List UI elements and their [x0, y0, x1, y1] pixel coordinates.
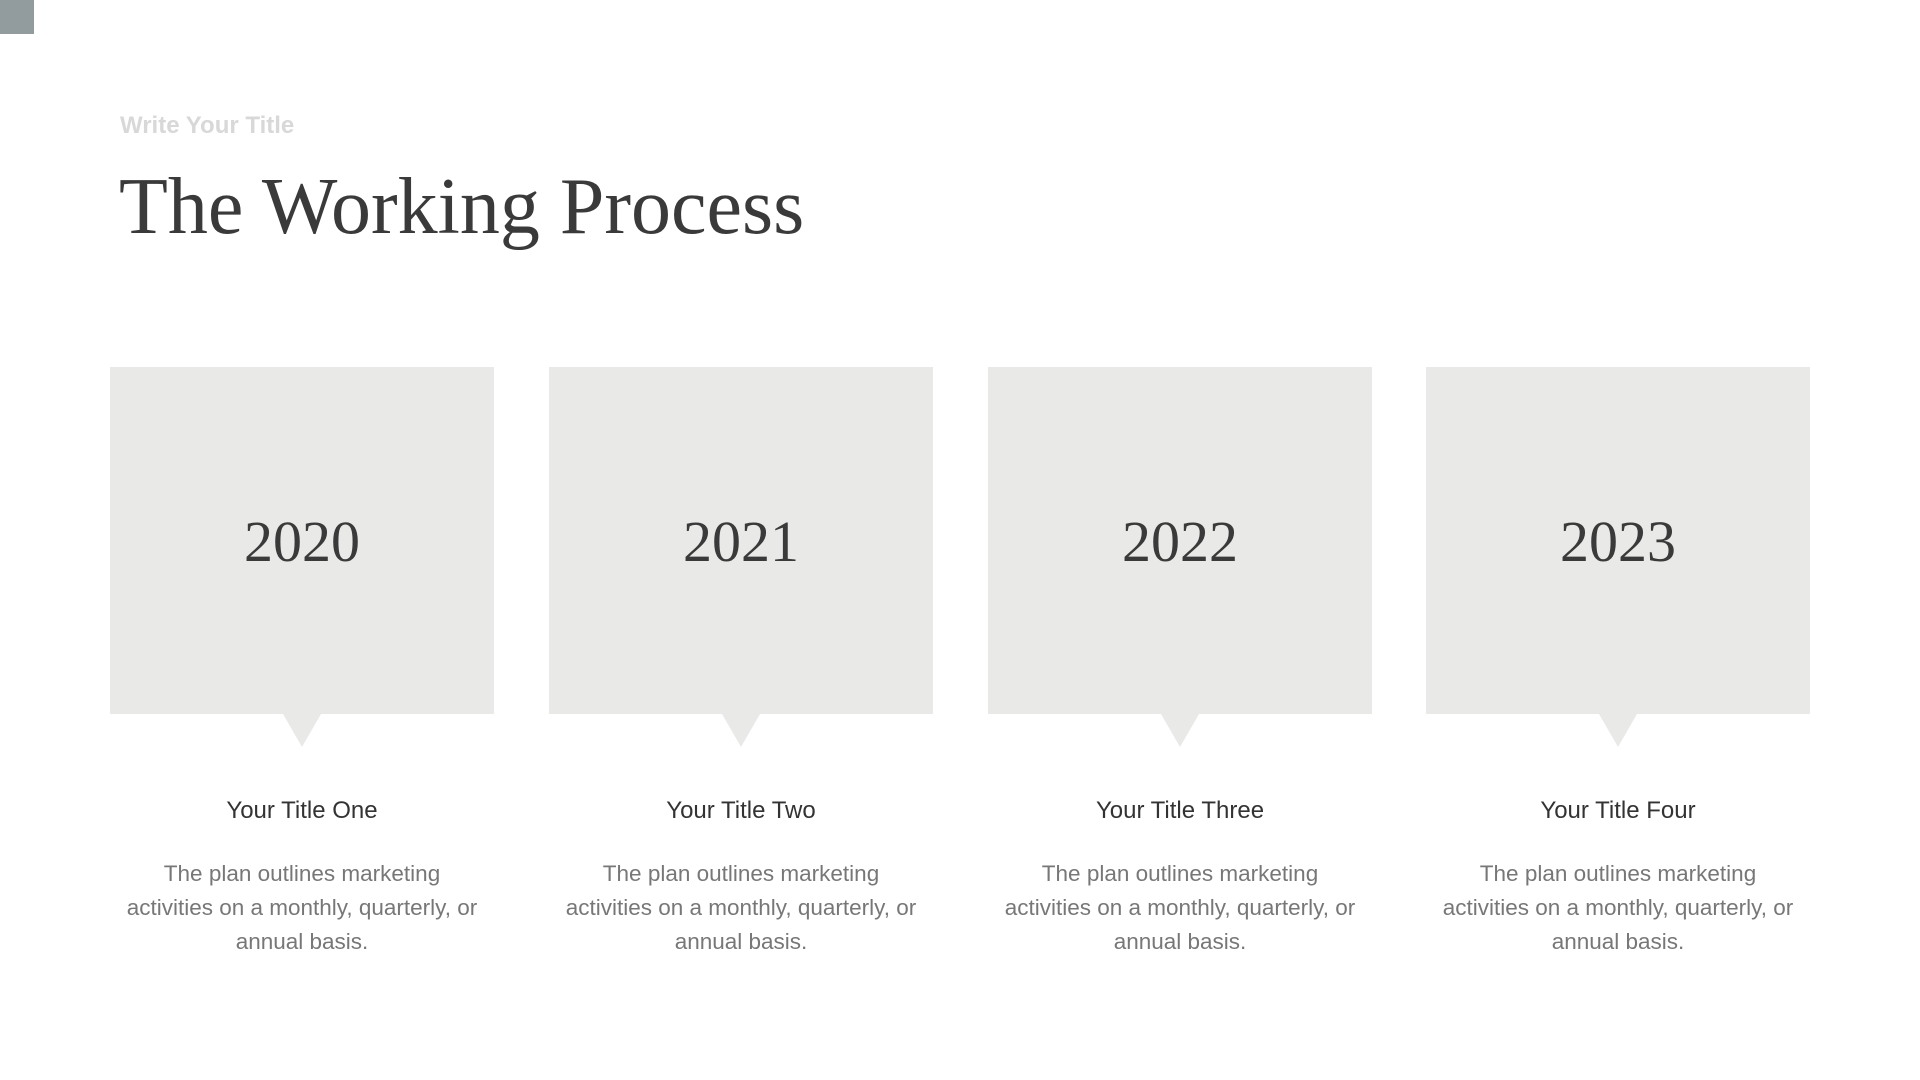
- text: three: The plan outlines marketing: [1042, 861, 1318, 886]
- text: two: [566, 797, 916, 954]
- panel: 2021: [549, 367, 933, 714]
- text: four: The plan outlines marketing: [1480, 861, 1756, 886]
- text: four: Your Title Four: [1540, 797, 1696, 824]
- text: four: [1443, 797, 1793, 954]
- title: The Working Process: [119, 163, 804, 251]
- panel: 2020: [110, 367, 494, 714]
- panel: 2022: 2022: [1122, 509, 1238, 574]
- text: four: annual basis.: [1552, 929, 1684, 954]
- panel: 2023: [1426, 367, 1810, 714]
- text: four: activities on a monthly, quarterly, or: [1443, 895, 1793, 920]
- text: one: The plan outlines marketing: [164, 861, 440, 886]
- panel: 2023: 2023: [1560, 509, 1676, 574]
- panel: 2020: 2020: [244, 509, 360, 574]
- text: two: annual basis.: [675, 929, 807, 954]
- text: two: Your Title Two: [666, 797, 816, 824]
- text: two: activities on a monthly, quarterly, or: [566, 895, 916, 920]
- text: three: Your Title Three: [1096, 797, 1264, 824]
- text: one: activities on a monthly, quarterly, or: [127, 895, 477, 920]
- text: two: The plan outlines marketing: [603, 861, 879, 886]
- text: one: Your Title One: [226, 797, 378, 824]
- text: three: activities on a monthly, quarterly, or: [1005, 895, 1355, 920]
- panel: 2021: 2021: [683, 509, 799, 574]
- text: three: [1005, 797, 1355, 954]
- panel: 2022: [988, 367, 1372, 714]
- text: three: annual basis.: [1114, 929, 1246, 954]
- text: one: annual basis.: [236, 929, 368, 954]
- text: one: [127, 797, 477, 954]
- subtitle: Write Your Title: [120, 112, 294, 139]
- corner square: [0, 0, 34, 34]
